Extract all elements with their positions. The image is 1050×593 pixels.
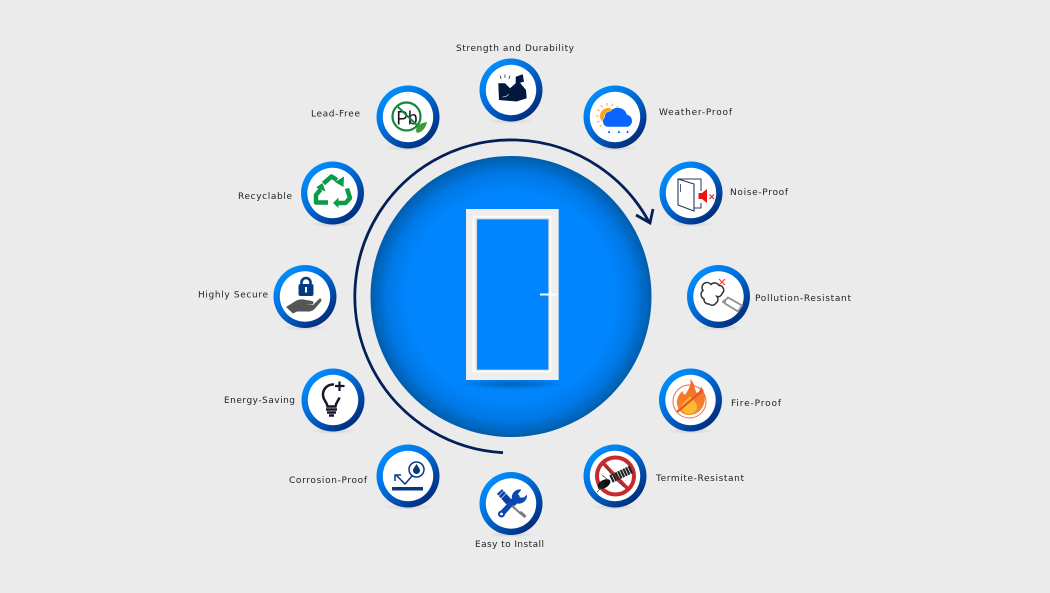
feature: energy-saving <box>224 368 364 434</box>
icon: padlock over hand <box>286 278 321 314</box>
icon: door with muted speaker <box>678 179 714 211</box>
feature: corrosion-proof <box>289 444 440 510</box>
icon: recycling arrows <box>316 176 350 208</box>
icon: crossed termite <box>596 458 634 494</box>
label: Lead-Free <box>311 110 360 120</box>
door <box>460 209 564 390</box>
feature: strength and durability <box>456 44 575 124</box>
feature: noise-proof <box>660 162 789 227</box>
icon: lead-free symbol: Pb <box>396 108 418 130</box>
label: Corrosion-Proof <box>289 476 368 486</box>
circular arrow <box>355 140 653 453</box>
feature: highly secure <box>198 265 336 330</box>
icon: wrench and screwdriver <box>498 489 527 518</box>
icon: flexed arm <box>498 74 527 102</box>
door handle <box>540 294 557 296</box>
icon: smoke and spray <box>701 279 742 312</box>
label: Pollution-Resistant <box>755 294 851 304</box>
icon: surface with water drop <box>392 462 424 490</box>
label: Easy to Install <box>475 540 544 550</box>
icon: crossed flame <box>673 379 706 418</box>
feature: termite-resistant <box>584 444 744 510</box>
label: Noise-Proof <box>730 188 789 198</box>
feature: fire-proof <box>659 368 782 434</box>
icon: light bulb with plus <box>323 382 344 416</box>
feature: recyclable <box>238 162 364 227</box>
feature: weather-proof <box>584 86 733 151</box>
label: Recyclable <box>238 192 292 202</box>
central blue disc <box>370 156 652 437</box>
icon: sun and rain cloud <box>596 103 632 133</box>
label: Termite-Resistant <box>655 474 744 484</box>
feature: pollution-resistant <box>687 265 851 330</box>
label: Highly Secure <box>198 290 268 300</box>
label: Strength and Durability <box>456 44 575 54</box>
feature: lead-free <box>311 86 440 151</box>
label: Energy-Saving <box>224 396 295 406</box>
feature: easy to install <box>475 472 544 550</box>
label: Weather-Proof <box>659 108 733 118</box>
label: Fire-Proof <box>731 399 782 409</box>
